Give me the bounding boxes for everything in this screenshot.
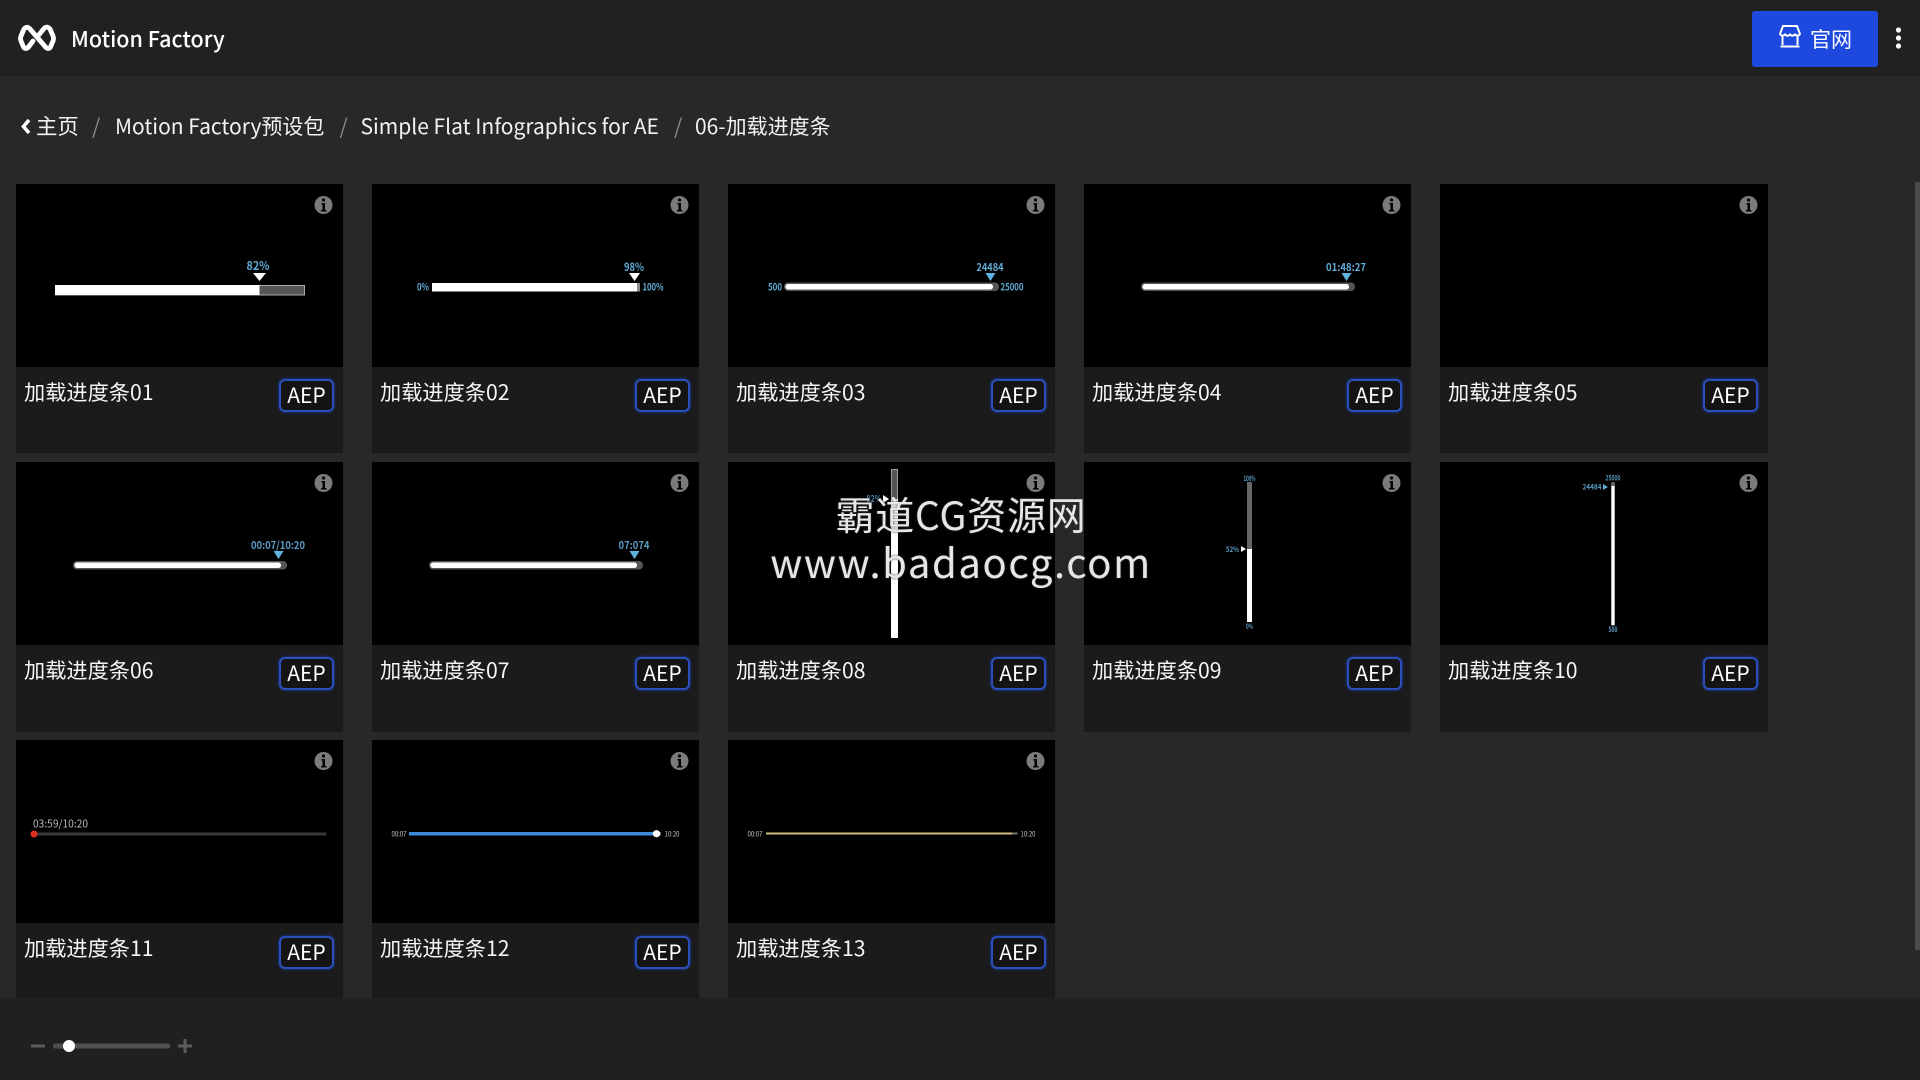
breadcrumb: / [340, 111, 348, 141]
thumbnail 07: 07:074 [618, 538, 650, 553]
watermark line 2: www.badaocg.com [770, 532, 1152, 590]
thumbnail 06 [16, 462, 343, 645]
AEP badge: AEP [999, 658, 1038, 688]
thumbnail 04: 01:48:27 [1326, 260, 1366, 275]
AEP badge: AEP [287, 380, 326, 410]
crumb: presets: Motion Factory预设包 [115, 111, 324, 141]
crumb: current: 06-加载进度条 [695, 111, 831, 141]
card 11 [16, 740, 343, 1009]
AEP badge [1703, 657, 1758, 690]
AEP badge: AEP [287, 937, 326, 967]
title 08: 加载进度条08 [736, 654, 865, 685]
plus [178, 1039, 192, 1053]
thumbnail 01 [16, 184, 343, 367]
button label: 官网 [1810, 24, 1852, 54]
AEP badge [1703, 379, 1758, 412]
AEP badge [635, 379, 690, 412]
thumbnail 10: 24484 [1582, 482, 1602, 492]
AEP badge [279, 379, 334, 412]
AEP badge: AEP [643, 658, 682, 688]
thumbnail 08: 82% [866, 491, 882, 505]
thumbnail 03: 25000 [1000, 278, 1024, 294]
thumbnail 02: 100% [642, 278, 664, 294]
title 07: 加载进度条07 [380, 654, 509, 685]
title 12: 加载进度条12 [380, 932, 509, 963]
AEP badge [1347, 379, 1402, 412]
thumbnail 07 [372, 462, 699, 645]
AEP badge: AEP [643, 937, 682, 967]
card 08 [728, 462, 1055, 732]
thumbnail 01: 82% [246, 257, 270, 274]
AEP badge: AEP [1711, 658, 1750, 688]
AEP badge: AEP [287, 658, 326, 688]
thumbnail 03 [728, 184, 1055, 367]
title 01: 加载进度条01 [24, 376, 153, 407]
thumbnail 02: 0% [417, 278, 429, 294]
card 03 [728, 184, 1055, 453]
card 05 [1440, 184, 1768, 453]
header bar [0, 0, 1920, 76]
thumbnail 09: 0% [1246, 622, 1253, 632]
card 10 [1440, 462, 1768, 732]
thumbnail 03: 24484 [976, 260, 1004, 275]
crumb: home: 主页 [36, 110, 79, 141]
thumbnail 05 [1440, 184, 1768, 367]
thumbnail 12 [372, 740, 699, 923]
slider thumb [63, 1040, 75, 1052]
thumbnail 02: 98% [624, 259, 644, 275]
icon: Motion Factory logo [18, 24, 56, 51]
title 10: 加载进度条10 [1448, 654, 1577, 685]
card 06 [16, 462, 343, 732]
thumbnail 03: 500 [768, 278, 782, 294]
watermark [770, 486, 1152, 590]
card 09 [1084, 462, 1411, 732]
title 02: 加载进度条02 [380, 376, 509, 407]
AEP badge [279, 657, 334, 690]
AEP badge: AEP [643, 380, 682, 410]
AEP badge [991, 379, 1046, 412]
title 06: 加载进度条06 [24, 654, 153, 685]
AEP badge: AEP [999, 937, 1038, 967]
brand name: Motion Factory [71, 23, 225, 54]
thumbnail 13: 00:07 [748, 830, 763, 840]
AEP badge [279, 936, 334, 969]
official site button [1752, 11, 1878, 67]
title 09: 加载进度条09 [1092, 654, 1221, 685]
AEP badge [991, 936, 1046, 969]
thumbnail 09 [1084, 462, 1411, 645]
title 03: 加载进度条03 [736, 376, 865, 407]
thumbnail 04 [1084, 184, 1411, 367]
title 11: 加载进度条11 [24, 932, 153, 963]
card 04 [1084, 184, 1411, 453]
thumbnail 09: 100% [1244, 474, 1256, 484]
watermark line 1: 霸道CG资源网 [835, 486, 1087, 542]
thumbnail 13 [728, 740, 1055, 923]
thumbnail 13: 10:20 [1020, 830, 1036, 840]
AEP badge: AEP [999, 380, 1038, 410]
AEP badge: AEP [1355, 658, 1394, 688]
card 12 [372, 740, 699, 1009]
thumbnail 06: 00:07/10:20 [251, 538, 305, 553]
breadcrumb [21, 110, 831, 141]
crumb: pack: Simple Flat Infographics for AE [360, 111, 659, 141]
thumbnail 02 [372, 184, 699, 367]
icon: more menu [1896, 27, 1902, 49]
thumbnail 10: 25000 [1606, 474, 1620, 484]
title 04: 加载进度条04 [1092, 376, 1221, 407]
breadcrumb: / [674, 111, 682, 141]
breadcrumb: / [92, 111, 100, 141]
card 13 [728, 740, 1055, 1009]
thumbnail 11: 03:59/10:20 [33, 816, 88, 832]
icon: back chevron [21, 118, 30, 134]
AEP badge [635, 936, 690, 969]
title 05: 加载进度条05 [1448, 376, 1577, 407]
icon: store [1779, 25, 1801, 48]
AEP badge: AEP [1711, 380, 1750, 410]
zoom slider [31, 1039, 192, 1053]
thumbnail 12: 00:07 [392, 830, 407, 840]
card 01 [16, 184, 343, 453]
AEP badge [635, 657, 690, 690]
AEP badge [1347, 657, 1402, 690]
footer zoom bar [0, 998, 1920, 1080]
thumbnail 12: 10:20 [664, 830, 680, 840]
slider track [53, 1044, 170, 1048]
card 02 [372, 184, 699, 453]
thumbnail 10 [1440, 462, 1768, 645]
thumbnail 08 [728, 462, 1055, 645]
thumbnail 10: 500 [1608, 625, 1618, 635]
title 13: 加载进度条13 [736, 932, 865, 963]
thumbnail 11 [16, 740, 343, 923]
minus [31, 1044, 45, 1048]
card 07 [372, 462, 699, 732]
scrollbar [1915, 182, 1920, 950]
AEP badge [991, 657, 1046, 690]
thumbnail 09: 52% [1226, 544, 1239, 555]
AEP badge: AEP [1355, 380, 1394, 410]
